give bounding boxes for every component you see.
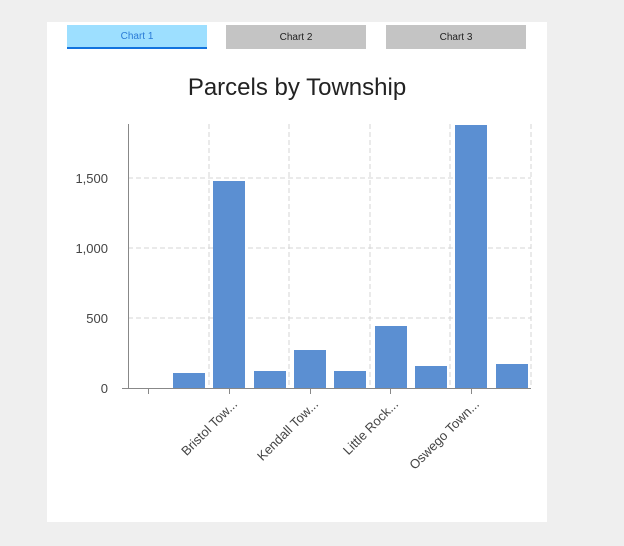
y axis labels: 0 bbox=[101, 381, 108, 396]
y axis labels: 1,000 bbox=[75, 241, 108, 256]
tab: Chart 2 bbox=[226, 25, 366, 49]
y axis labels bbox=[75, 171, 108, 396]
tab: Chart 1: Chart 1 bbox=[121, 31, 153, 42]
y axis labels: 1,500 bbox=[75, 171, 108, 186]
title: Parcels by Township bbox=[188, 74, 406, 101]
x axis labels bbox=[178, 397, 482, 472]
tab: Chart 3 bbox=[386, 25, 526, 49]
panel: chart card bbox=[47, 22, 547, 522]
x axis labels: Little Rock... bbox=[340, 397, 401, 458]
y axis labels: 500 bbox=[86, 311, 108, 326]
x axis labels: Bristol Tow... bbox=[178, 397, 240, 459]
tab: Chart 2: Chart 2 bbox=[280, 32, 312, 43]
axes bbox=[122, 124, 531, 394]
x axis labels: Oswego Town... bbox=[406, 397, 482, 472]
x axis labels: Kendall Tow... bbox=[254, 397, 321, 464]
bars bbox=[173, 125, 528, 388]
tab: Chart 3: Chart 3 bbox=[440, 32, 472, 43]
tab: Chart 1 bbox=[67, 25, 207, 49]
